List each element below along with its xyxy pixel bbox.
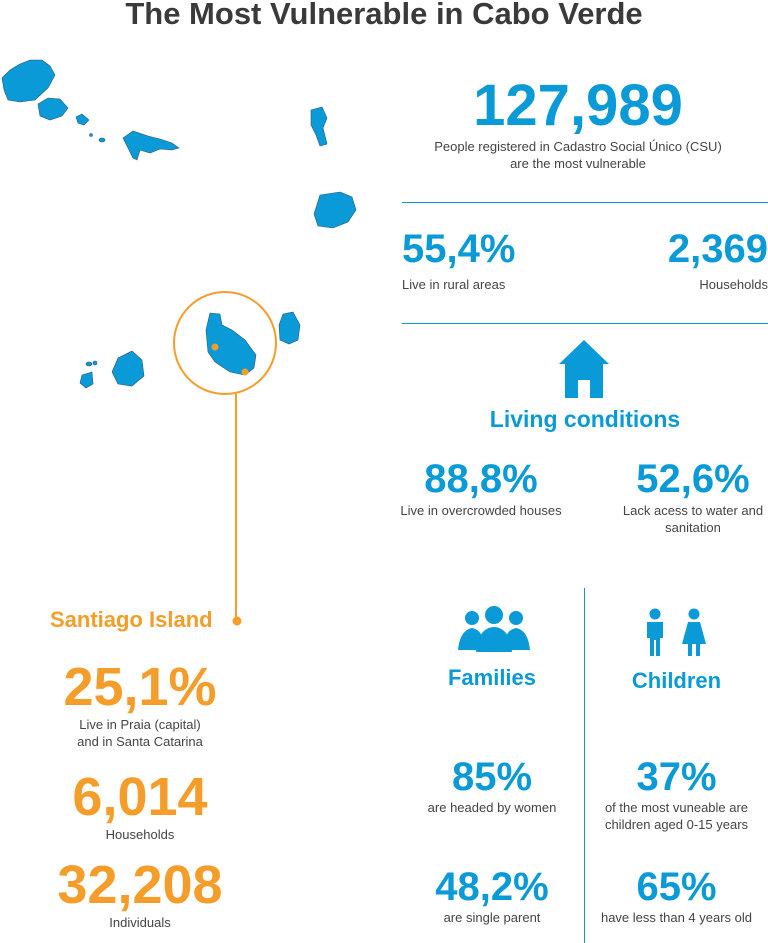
stat: children 0-15: 37% [636, 755, 717, 799]
stat: rural: 55,4% [402, 227, 515, 271]
stat: children 0-15 [605, 755, 748, 832]
stat: overcrowded [400, 457, 562, 518]
stat: individuals: 32,208 [57, 855, 223, 915]
stat: water: 52,6% [636, 457, 750, 501]
stat: households: Households [699, 277, 768, 292]
icon: house [559, 340, 609, 398]
stat: santiago households: Households [106, 827, 174, 842]
stat: overcrowded: 88,8% [424, 457, 538, 501]
stat: registered: People registered in Cadastro Social Único (CSU) [434, 139, 722, 154]
icon: families [458, 606, 530, 652]
stat: women [428, 755, 556, 815]
stat: Praia: 25,1% [63, 657, 217, 717]
heading: Santiago Island: Santiago Island [50, 607, 213, 632]
stat: under 4: 65% [636, 865, 717, 909]
stat: households: 2,369 [668, 227, 768, 271]
stat: water: Lack acess to water and sanitation [623, 503, 763, 535]
stat: women: 85% [452, 755, 532, 799]
stat: individuals: Individuals [109, 915, 171, 930]
stat: under 4: have less than 4 years old [601, 910, 752, 925]
stat: water [623, 457, 763, 535]
stat: registered [434, 73, 722, 171]
heading: families: Families [448, 665, 536, 690]
stat: single parent: are single parent [444, 910, 540, 925]
stat: overcrowded: Live in overcrowded houses [400, 503, 562, 518]
stat: single parent: 48,2% [435, 865, 549, 909]
stat: Praia [63, 657, 217, 749]
stat: rural [402, 227, 515, 292]
icon: children [647, 608, 706, 656]
stat: rural: Live in rural areas [402, 277, 505, 292]
stat: children 0-15: of the most vuneable are children aged 0-15 years [605, 800, 748, 832]
stat: santiago households: 6,014 [72, 767, 208, 827]
stat: households [668, 227, 768, 292]
stat: registered: are the most vulnerable [510, 156, 646, 171]
stat: registered: 127,989 [473, 73, 683, 138]
heading: living conditions: Living conditions [490, 406, 680, 432]
stat: under 4 [601, 865, 752, 925]
heading: children: Children [632, 668, 721, 693]
map of Cabo Verde [2, 60, 356, 626]
stat: Praia: Live in Praia (capital) [79, 717, 201, 732]
stat: women: are headed by women [428, 800, 556, 815]
stat: Praia: and in Santa Catarina [77, 734, 203, 749]
